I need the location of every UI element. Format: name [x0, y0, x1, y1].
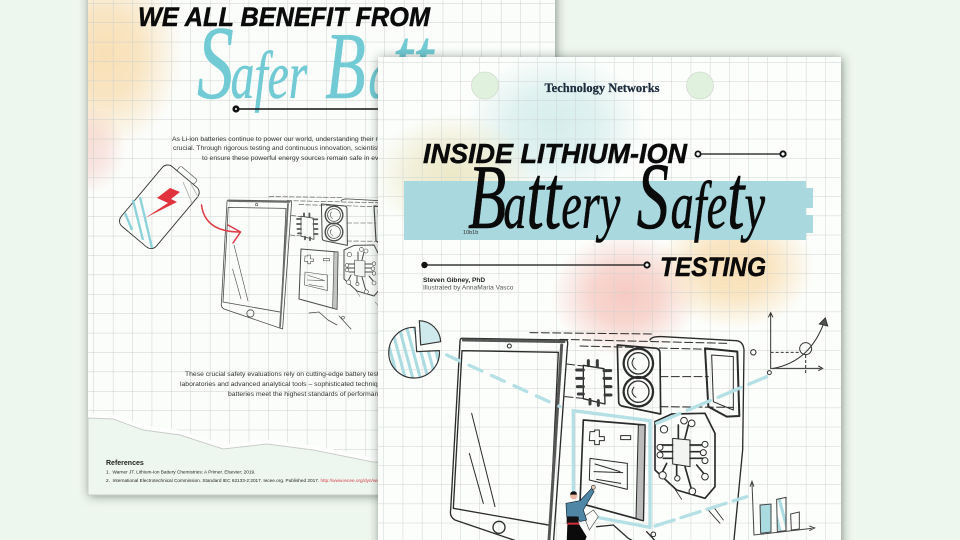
front page colour wash — [372, 53, 815, 357]
rule beside testing — [421, 262, 650, 268]
back heading: WE ALL BENEFIT FROM — [138, 2, 430, 32]
references: 2. International Electrotechnical Commission. Standard IEC 62133-2:2017. Iecee.org. Published 2017. http://www.iecee.org/dyn/www — [106, 478, 384, 483]
torn paper edge — [88, 416, 555, 495]
script title: a — [503, 167, 526, 243]
second paragraph: laboratories and advanced analytical tools – sophisticated techniques that ensure — [180, 381, 425, 388]
second paragraph: batteries meet the highest standards of performance. — [228, 391, 388, 398]
title line 3: TESTING — [660, 252, 766, 282]
back script heading: ttery — [392, 4, 494, 121]
device line drawing — [450, 333, 756, 540]
front page — [372, 53, 841, 540]
teal connector lines — [447, 355, 767, 527]
back page colour wash — [88, 0, 176, 188]
icon: line chart — [767, 313, 828, 375]
references: 1. Warner JT. Lithium-Ion Battery Chemistries: A Primer. Elsevier; 2019. — [106, 470, 255, 474]
back page paper — [88, 0, 555, 495]
script title: B — [468, 147, 506, 249]
back page — [27, 0, 555, 495]
arrow: red curved — [202, 205, 240, 243]
main illustration — [389, 313, 828, 540]
front page paper — [378, 57, 841, 540]
author credits: Illustrated by AnnaMaria Vasco — [423, 284, 514, 292]
intro paragraph: to ensure these powerful energy sources remain safe in everyday use. — [202, 155, 414, 162]
back script heading: S — [197, 4, 234, 121]
references: References — [106, 460, 144, 467]
second paragraph: These crucial safety evaluations rely on cutting-edge battery testing — [185, 371, 388, 378]
rule beside title — [695, 151, 786, 157]
intro paragraph: crucial. Through rigorous testing and continuous innovation, scientists work — [173, 145, 399, 152]
front page grid — [378, 57, 841, 540]
icon: tilted battery with lightning bolt — [117, 158, 206, 251]
small mark on banner: 10b1b — [463, 230, 478, 236]
back device line drawing — [221, 197, 405, 329]
figure: person pointing — [566, 485, 598, 540]
heading rule — [232, 105, 378, 113]
binder hole right — [686, 72, 714, 99]
icon: bar chart — [750, 481, 815, 535]
back script heading: B — [325, 13, 366, 119]
script title: afe — [671, 167, 727, 243]
second paragraph — [180, 371, 425, 398]
intro paragraph — [172, 136, 414, 162]
logo: Technology Networks — [544, 81, 660, 95]
back page grid — [88, 0, 555, 470]
references — [106, 460, 384, 483]
binder hole left — [472, 72, 498, 99]
author credits: Steven Gibney, PhD — [423, 277, 485, 284]
back script heading: afer — [231, 38, 308, 113]
script title: S — [637, 144, 669, 249]
icon: pie chart — [389, 321, 441, 378]
title line 1: INSIDE LITHIUM-ION — [423, 138, 688, 169]
back script heading: a — [368, 38, 392, 113]
script title: ty — [727, 147, 765, 249]
script title: ttery — [526, 147, 620, 249]
intro paragraph: As Li-ion batteries continue to power our world, understanding their risks is — [172, 136, 397, 143]
battery banner — [404, 181, 813, 240]
author credits — [423, 277, 514, 292]
